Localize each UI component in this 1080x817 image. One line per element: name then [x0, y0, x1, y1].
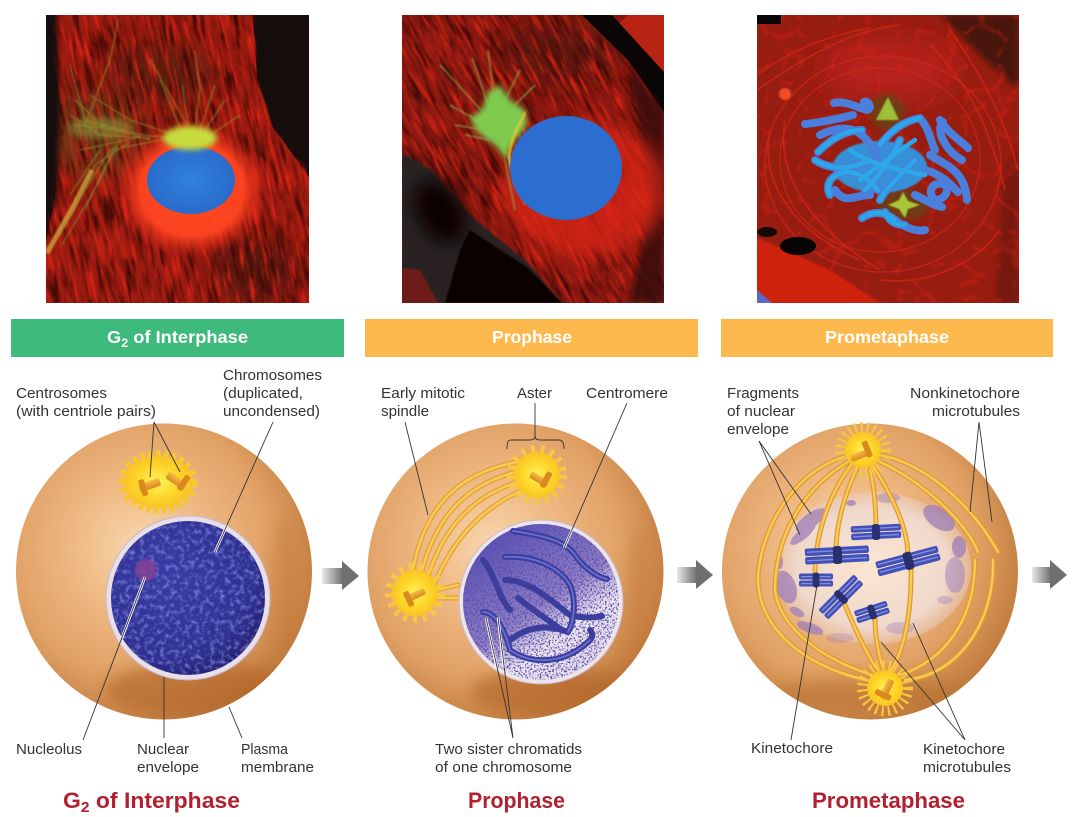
diagram: G2 of interphase cell [16, 424, 312, 720]
label: nonkinetochore microtubules: microtubules [932, 403, 1020, 420]
phase bar: Prophase: Prophase [492, 327, 572, 347]
aster top [845, 432, 881, 468]
label: nuclear envelope: Nuclear [137, 741, 189, 758]
arrow: prophase to prometaphase [677, 560, 713, 589]
label: nonkinetochore microtubules: Nonkinetochore [910, 385, 1020, 402]
condensed chromosomes [483, 531, 607, 660]
label: nuclear envelope: envelope [137, 759, 199, 776]
phase bar: G2 of Interphase [11, 319, 344, 357]
green spindle poles [869, 94, 929, 221]
aster bottom [867, 670, 903, 706]
phase bar: G2 of Interphase: 2 [121, 336, 129, 350]
chromatin nucleus [111, 521, 265, 675]
phase bar: Prometaphase [721, 319, 1053, 357]
label: two sister chromatids: Two sister chromatids [435, 741, 582, 758]
panel: micrograph prophase [402, 15, 664, 303]
phase bar: G2 of Interphase: of Interphase [128, 327, 248, 347]
panel: micrograph prometaphase [757, 15, 1019, 303]
plasma membrane cell body [722, 424, 1018, 720]
label: centromere: Centromere [586, 385, 668, 402]
blue nucleus [147, 146, 235, 214]
heading: G2 of Interphase: G [63, 788, 80, 813]
plasma membrane cell body [16, 424, 312, 720]
label: centromere [564, 385, 668, 548]
label: early mitotic spindle [381, 385, 466, 515]
diagram: prometaphase cell [722, 424, 1018, 720]
label: chromosomes: (duplicated, [223, 385, 303, 402]
nuclear envelope [459, 520, 623, 684]
cell shading [470, 530, 654, 716]
diagram: prophase cell [368, 424, 664, 720]
label: centrosomes: Centrosomes [16, 385, 107, 402]
label: plasma membrane: membrane [241, 759, 314, 776]
speckled nucleus [463, 524, 619, 680]
label: aster [507, 385, 564, 449]
label: chromosomes: Chromosomes [223, 367, 322, 384]
label: nonkinetochore microtubules [910, 385, 1020, 522]
aster bottom [392, 570, 438, 616]
panel: micrograph G2 of interphase [46, 15, 309, 303]
nucleolus [135, 559, 157, 581]
label: two sister chromatids [435, 617, 582, 776]
aster top [514, 452, 560, 498]
heading: G2 of Interphase: 2 [81, 799, 90, 816]
blue nucleus [510, 116, 622, 220]
label: plasma membrane: Plasma [241, 741, 289, 758]
label: fragments of nuclear envelope: envelope [727, 421, 789, 438]
label: centrosomes [16, 385, 180, 477]
chromosomes with kinetochores [799, 523, 941, 624]
label: kinetochore: Kinetochore [751, 740, 833, 757]
green aster [470, 85, 527, 158]
label: kinetochore microtubules: Kinetochore [923, 741, 1005, 758]
microtubules [758, 455, 998, 680]
label: chromosomes: uncondensed) [223, 403, 320, 420]
label: nuclear envelope [137, 677, 199, 776]
phase bar: Prometaphase: Prometaphase [825, 327, 949, 347]
label: early mitotic spindle: Early mitotic [381, 385, 466, 402]
label: kinetochore microtubules: microtubules [923, 759, 1011, 776]
label: centrosomes: (with centriole pairs) [16, 403, 156, 420]
label: chromosomes [215, 367, 322, 552]
label: nucleolus [16, 577, 145, 758]
label: fragments of nuclear envelope [727, 385, 811, 535]
centrosomes [124, 456, 192, 508]
early mitotic spindle [412, 461, 530, 598]
label: fragments of nuclear envelope: of nuclear [727, 403, 795, 420]
phase bar: Prophase [365, 319, 698, 357]
blue chromosomes [805, 102, 968, 231]
label: aster: Aster [517, 385, 552, 402]
heading: Prophase: Prophase [468, 788, 565, 813]
heading: G2 of Interphase: of Interphase [90, 788, 240, 813]
label: plasma membrane [229, 707, 314, 776]
phase bar: G2 of Interphase: G [107, 327, 121, 347]
label: nucleolus: Nucleolus [16, 741, 82, 758]
label: kinetochore [751, 585, 833, 757]
heading: Prometaphase: Prometaphase [812, 788, 965, 813]
label: kinetochore microtubules [881, 623, 1011, 776]
arrow: prometaphase onward [1032, 560, 1067, 589]
green centrosome glow [163, 126, 217, 150]
label: two sister chromatids: of one chromosome [435, 759, 572, 776]
label: early mitotic spindle: spindle [381, 403, 429, 420]
plasma membrane cell body [368, 424, 664, 720]
nuclear envelope [106, 516, 270, 680]
label: fragments of nuclear envelope: Fragments [727, 385, 799, 402]
cell shading [105, 520, 301, 718]
arrow: G2 to prophase [322, 561, 359, 590]
cell shading [770, 677, 970, 713]
spindle zone and fragments of nuclear envelope [771, 492, 971, 644]
